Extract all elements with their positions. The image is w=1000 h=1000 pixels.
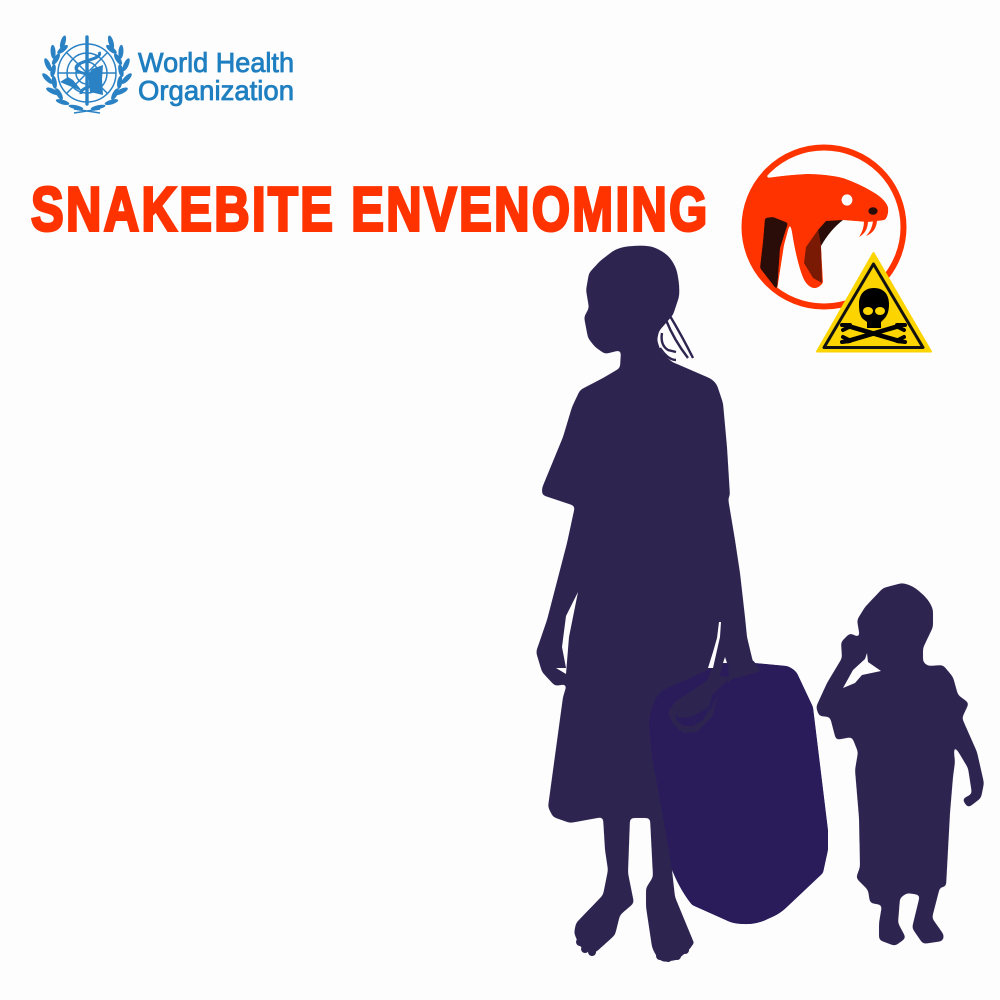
gap between left arm and skirt [556,592,578,674]
hair braids [660,316,693,360]
toes [576,938,694,962]
handle openings [676,664,729,726]
snake fang sheath [760,217,788,290]
icon: poison warning triangle [817,253,931,352]
snake eye [842,194,852,206]
WHO logo [41,35,294,113]
logo wordmark [138,47,294,106]
skull [859,288,889,328]
silhouette: child [816,583,984,946]
snake lower jaw [804,230,822,283]
logo wordmark: World Health [138,47,294,78]
logo wordmark: Organization [138,75,294,106]
title: SNAKEBITE ENVENOMING [31,174,710,244]
snake fangs [859,221,877,237]
gap between right arm and skirt [708,622,727,668]
snake mouth [818,220,843,246]
gap between child arm and chest [843,653,881,688]
crossbones [848,326,899,341]
jerrycan handle [668,660,761,733]
icon: snake in circle [744,148,904,306]
jerrycan [649,660,828,924]
snake nostril [868,207,878,215]
icon: WHO emblem [41,35,133,113]
snake head and body [745,170,888,290]
silhouette: girl [536,246,763,962]
